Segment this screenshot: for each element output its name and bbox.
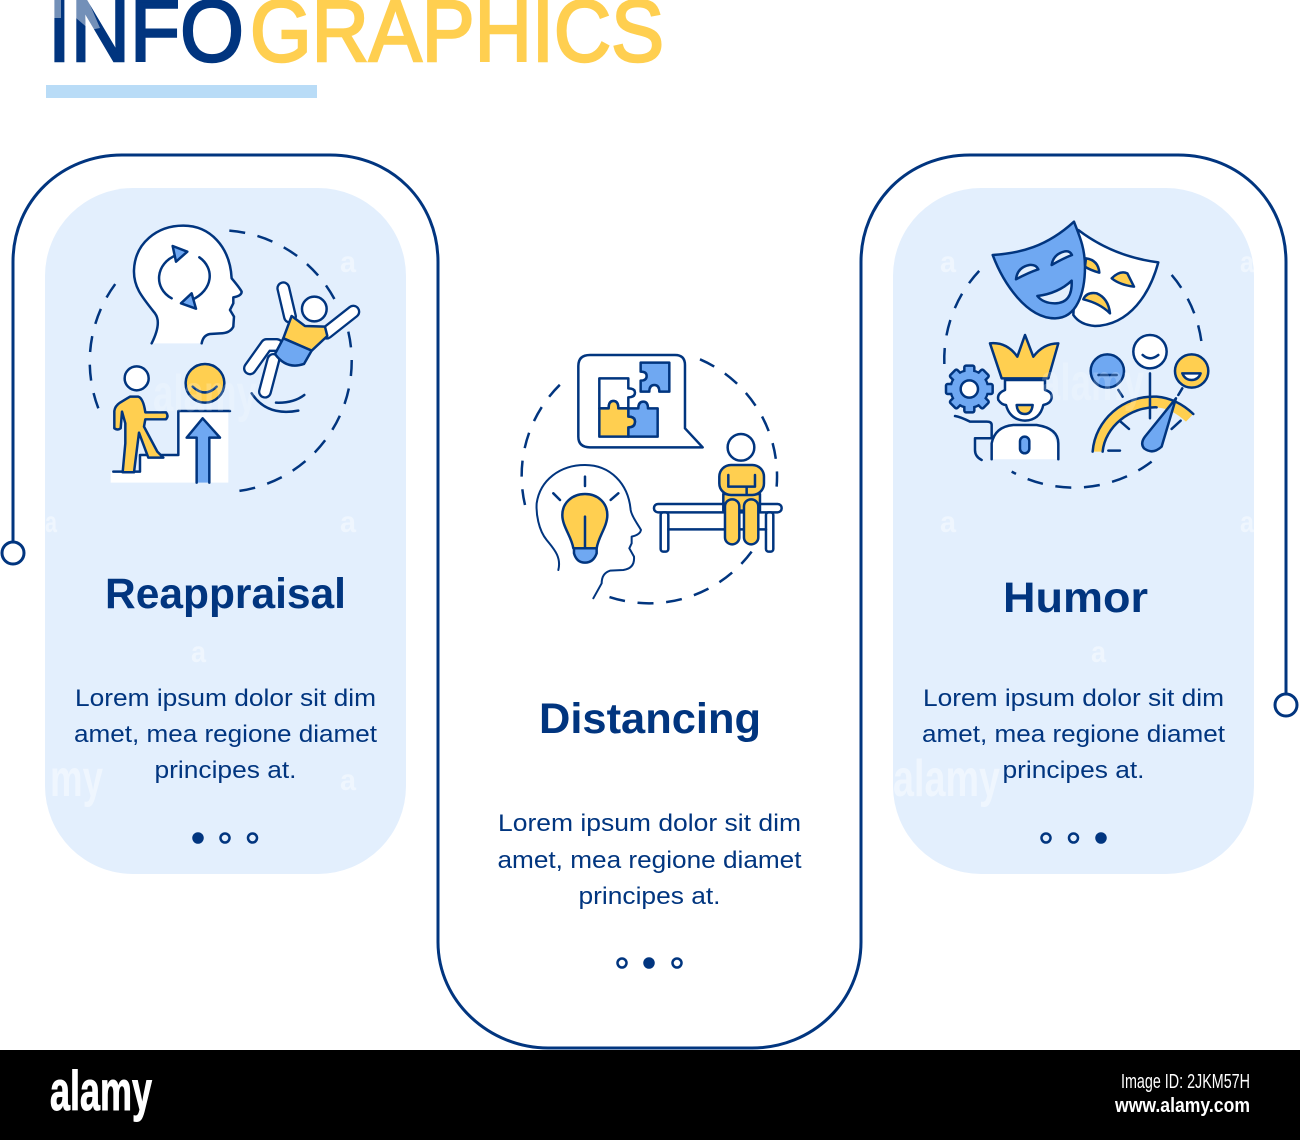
panel background: reappraisal — [45, 188, 406, 874]
footer url: www.alamy.com — [1114, 1095, 1250, 1117]
watermarks: a — [1091, 636, 1106, 669]
text block: distancing: Lorem ipsum dolor sit dim — [498, 810, 801, 837]
heading: reappraisal: Reappraisal — [105, 570, 346, 618]
title underline bar — [46, 85, 317, 98]
footer logo: alamy — [50, 1060, 152, 1122]
text block: reappraisal: Lorem ipsum dolor sit dim — [75, 685, 376, 712]
text block: reappraisal: principes at. — [154, 757, 296, 784]
pager dots: reappraisal — [194, 834, 257, 842]
heading: distancing: Distancing — [539, 695, 761, 743]
watermarks — [45, 246, 1254, 808]
icon: reappraisal — [90, 226, 353, 492]
watermarks: a — [191, 636, 206, 669]
text block: humor: amet, mea regione diamet — [922, 721, 1225, 748]
title — [47, 0, 664, 80]
text block: distancing: amet, mea regione diamet — [498, 847, 802, 874]
panel background: humor — [893, 188, 1254, 874]
outline end node — [1275, 694, 1297, 716]
icon: humor — [944, 222, 1208, 488]
watermarks: alamy — [153, 365, 257, 423]
watermarks: a — [940, 246, 956, 279]
text block: distancing — [498, 810, 802, 910]
watermarks: a — [45, 506, 57, 539]
text block: reappraisal: amet, mea regione diamet — [74, 721, 377, 748]
icon: distancing — [522, 355, 782, 603]
watermarks: a — [340, 246, 356, 279]
outline start node — [2, 542, 24, 564]
connecting panel outline — [13, 155, 1286, 1048]
watermarks: a — [1240, 246, 1254, 279]
watermarks: a — [340, 506, 356, 539]
text block: humor — [922, 685, 1225, 784]
heading: humor: Humor — [1003, 574, 1148, 622]
footer image id: Image ID: 2JKM57H — [1121, 1071, 1250, 1093]
pager dots: humor — [1042, 834, 1106, 842]
text block: reappraisal — [74, 685, 377, 784]
watermarks: alamy — [893, 750, 1000, 808]
watermarks: a — [340, 764, 356, 797]
watermarks: a — [940, 506, 956, 539]
watermarks: a — [1240, 506, 1254, 539]
watermarks: alamy — [1040, 354, 1144, 412]
watermarks: my — [50, 750, 103, 808]
text block: distancing: principes at. — [578, 883, 720, 910]
text block: humor: Lorem ipsum dolor sit dim — [923, 685, 1224, 712]
footer bar — [0, 1050, 1300, 1140]
text block: humor: principes at. — [1002, 757, 1144, 784]
pager dots: distancing — [618, 958, 682, 968]
